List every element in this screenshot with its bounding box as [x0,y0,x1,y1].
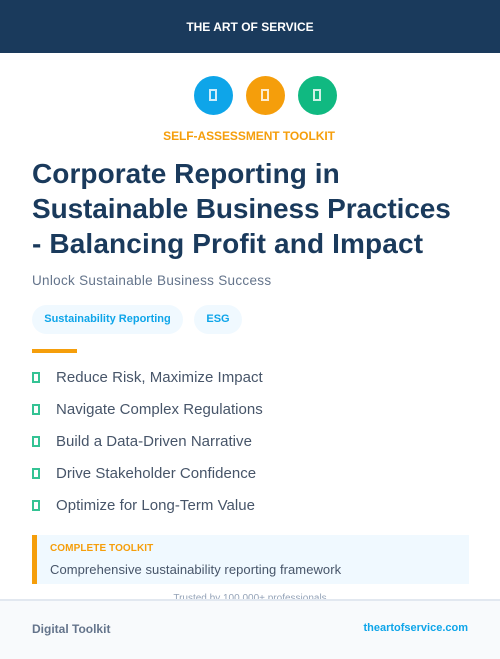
title: - Balancing Profit and Impact [32,228,423,259]
callout text: Comprehensive sustainability reporting framework [50,562,341,577]
accent rule [32,349,77,353]
title: Sustainable Business Practices [32,193,451,224]
benefit 2: Navigate Complex Regulations [56,401,263,418]
footer [0,599,500,659]
tag: sustainability reporting: Sustainability Reporting [44,313,171,325]
title: Corporate Reporting in [32,158,340,189]
kicker: SELF-ASSESSMENT TOOLKIT [163,129,335,143]
subtitle: Unlock Sustainable Business Success [32,273,271,288]
benefit 5: Optimize for Long-Term Value [56,497,255,514]
title [32,158,451,259]
icon: blue circle [194,76,233,115]
tag: ESG: ESG [206,313,230,325]
trust note: Trusted by 100,000+ professionals [173,593,327,604]
footer link: theartofservice.com [363,622,468,634]
benefit list [32,369,263,514]
icon: orange circle [246,76,285,115]
benefit 3: Build a Data-Driven Narrative [56,433,252,450]
brand name: THE ART OF SERVICE [186,20,314,34]
benefit 4: Drive Stakeholder Confidence [56,465,256,482]
callout [32,535,469,584]
tag: sustainability reporting [32,305,183,334]
header bar [0,0,500,53]
tag: ESG [194,305,242,334]
footer left label: Digital Toolkit [32,622,110,636]
icon: green circle [298,76,337,115]
callout label: COMPLETE TOOLKIT [50,543,153,554]
benefit 1: Reduce Risk, Maximize Impact [56,369,263,386]
callout accent [32,535,37,584]
